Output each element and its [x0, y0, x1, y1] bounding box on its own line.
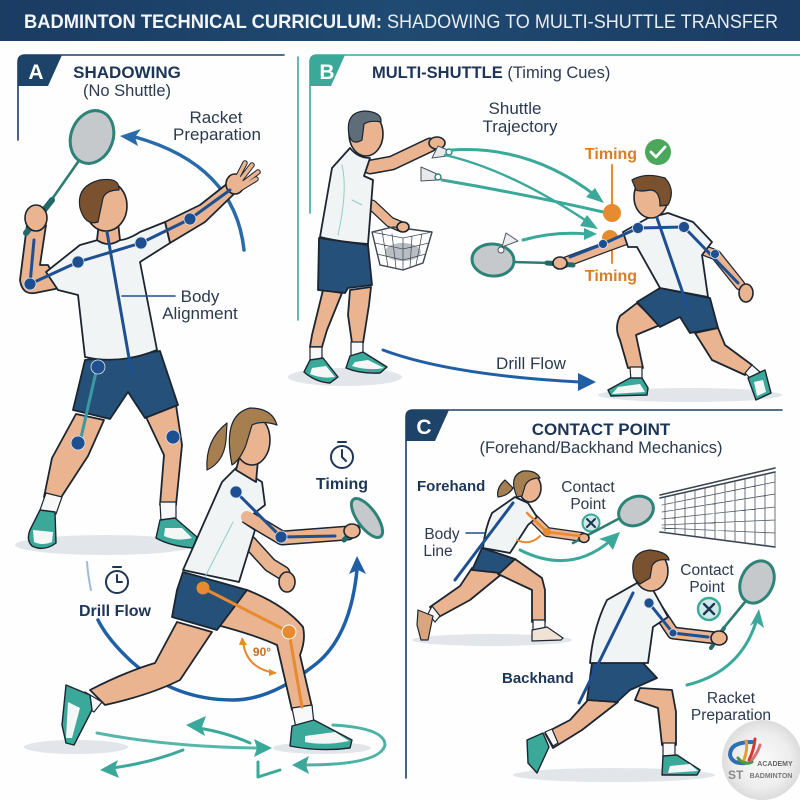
panel: B multi-shuttle: [288, 55, 800, 402]
label: body alignment: [162, 287, 238, 323]
net: [660, 468, 775, 547]
badge C: C: [416, 416, 432, 439]
title banner: [0, 0, 800, 41]
racket: [26, 104, 121, 233]
heading: shadowing: (No Shuttle): [83, 82, 171, 100]
heading: contact point: (Forehand/Backhand Mechanics): [479, 439, 723, 457]
arrows: shuttle trajectory: [442, 150, 612, 240]
badge A: A: [28, 61, 44, 84]
label: backhand: Backhand: [502, 670, 574, 687]
figure: man shadowing: [15, 104, 258, 555]
label: body alignment: Alignment: [162, 304, 238, 323]
label: racket preparation: Racket: [190, 108, 243, 127]
logo: academy badminton: [722, 720, 800, 800]
label: drill flow: Drill Flow: [496, 354, 567, 373]
label: forehand: Forehand: [417, 478, 485, 495]
label: racket preparation: [691, 690, 771, 724]
badge C: [406, 410, 449, 441]
heading: shadowing: [73, 63, 181, 100]
label: drill flow: Drill Flow: [79, 603, 152, 620]
heading: contact point: CONTACT POINT: [532, 420, 671, 439]
label: racket preparation: Racket: [707, 690, 756, 707]
panel: footwork lunge: [24, 408, 388, 778]
racket: [573, 491, 658, 543]
label: body line: [423, 526, 488, 560]
open hand: [226, 163, 258, 194]
arm markers: [230, 486, 335, 543]
panel C frame: [406, 410, 782, 778]
label: contact point backhand: [680, 562, 734, 596]
racket: [344, 494, 388, 542]
timing cue markers: [602, 165, 621, 263]
knee angle markers: [196, 582, 302, 707]
label: body line: Line: [423, 543, 453, 560]
label: shuttle trajectory: Trajectory: [483, 117, 558, 136]
logo: academy badminton: ST: [728, 768, 744, 782]
icon: shuttle basket: [372, 222, 432, 270]
icon: shuttles: [421, 146, 452, 181]
title banner: SHADOWING TO MULTI-SHUTTLE TRANSFER: [387, 11, 778, 33]
arrow: backhand racket path: [687, 609, 764, 685]
knee angle markers: 90°: [253, 645, 271, 659]
logo: academy badminton: ACADEMY: [757, 761, 793, 768]
racket: [711, 555, 781, 648]
panel: C contact point: [406, 410, 782, 782]
label: contact point backhand: Point: [689, 579, 725, 596]
icon: timing stopwatch: [331, 442, 353, 468]
joint markers: [570, 218, 738, 308]
title banner: BADMINTON TECHNICAL CURRICULUM:: [24, 11, 382, 33]
timing cues: Timing: [585, 146, 637, 163]
heading: contact point: [479, 420, 723, 457]
arrow: drill flow: [383, 350, 596, 391]
arrow: drill flow arc: [87, 556, 366, 700]
heading: shadowing: SHADOWING: [73, 63, 181, 82]
badge B: [310, 55, 345, 86]
label: racket preparation: Preparation: [691, 707, 771, 724]
label: shuttle trajectory: Shuttle: [489, 99, 541, 118]
timing cues: Timing: [585, 268, 637, 285]
arm markers: [517, 513, 580, 542]
label: shuttle trajectory: [483, 99, 558, 136]
label: racket preparation: Preparation: [173, 125, 261, 144]
body line: [455, 503, 513, 580]
figure: coach feeding: [288, 111, 445, 386]
label: timing: Timing: [316, 476, 368, 493]
label: contact point forehand: Point: [570, 496, 606, 513]
icon: contact marker forehand: [582, 514, 600, 532]
badge A: [18, 55, 62, 86]
arm markers: [644, 598, 708, 637]
figure: woman lunging: [24, 408, 388, 754]
label: contact point backhand: Contact: [680, 562, 734, 579]
icon: contact marker backhand: [698, 598, 720, 620]
body alignment markers: [24, 190, 230, 450]
label: contact point forehand: Contact: [561, 479, 615, 496]
label: body alignment: Body: [181, 287, 220, 306]
label: body line: Body: [424, 526, 460, 543]
label: racket preparation: [173, 108, 261, 144]
heading: multi-shuttle: MULTI-SHUTTLE (Timing Cues): [372, 64, 610, 82]
panel A frame: [18, 55, 284, 140]
arrows: footwork: [97, 716, 385, 778]
icon: drill flow stopwatch: [106, 567, 128, 593]
racket and shuttle: [471, 233, 573, 278]
body line: [579, 593, 633, 703]
arrow: forehand racket path: [520, 532, 620, 561]
panel: A shadowing: [15, 55, 284, 555]
arrow: racket preparation: [120, 129, 244, 250]
figure: backhand player: [513, 550, 781, 782]
label: contact point forehand: [561, 479, 615, 513]
figure: player hitting: [471, 165, 782, 402]
logo: academy badminton: BADMINTON: [750, 773, 792, 780]
badge B: B: [319, 61, 335, 84]
timing cues: [585, 139, 671, 285]
figure: forehand player: [412, 471, 658, 646]
panel B frame: [298, 55, 800, 320]
